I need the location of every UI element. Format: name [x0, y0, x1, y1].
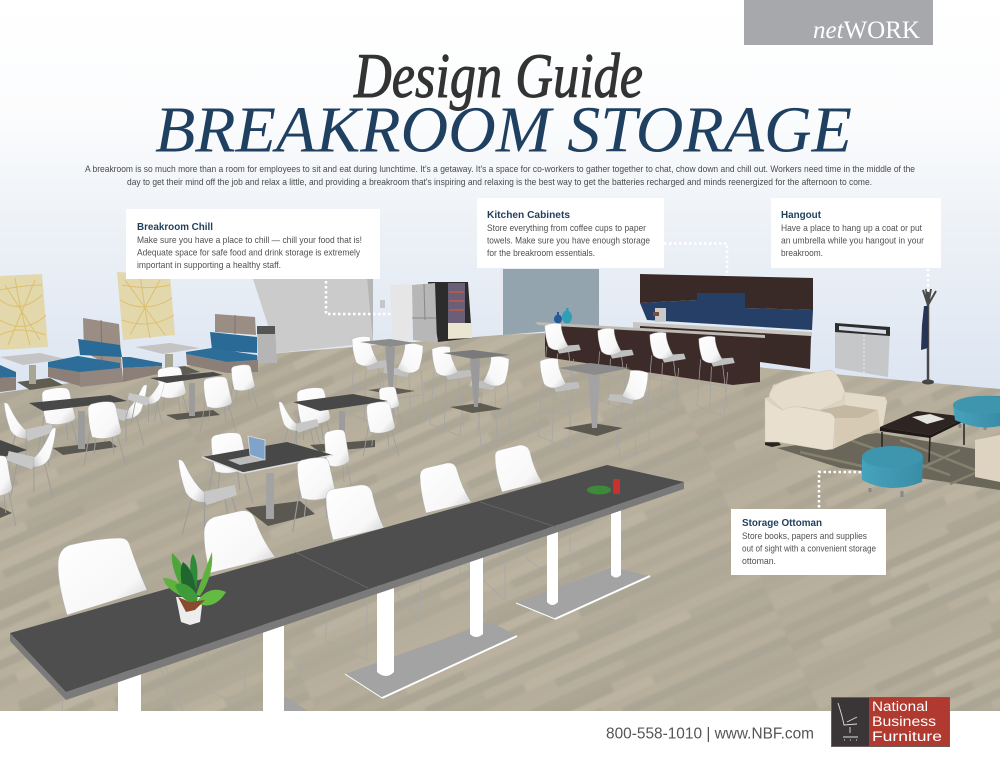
sofa right	[975, 435, 1000, 482]
bar table near kitchen	[538, 358, 650, 460]
floor	[0, 310, 1000, 730]
logo: National Business Furniture: National	[872, 699, 928, 714]
storage cabinet	[835, 323, 890, 377]
logo: National Business Furniture: Furniture	[872, 729, 942, 744]
lounge table left	[0, 353, 65, 390]
callout: storage ottoman: Storage Ottoman	[742, 517, 822, 529]
bar table far	[350, 336, 425, 433]
long table top	[10, 465, 684, 700]
blue vases	[554, 308, 572, 324]
intro paragraph	[85, 164, 915, 188]
lounge table centre	[135, 343, 200, 378]
booth seating right	[186, 314, 258, 373]
callout: storage ottoman: out of sight with a convenient storage	[742, 544, 876, 554]
footer band	[0, 711, 1000, 773]
callout: kitchen cabinets: for the breakroom essentials.	[487, 248, 595, 258]
refrigerator and vending machine	[390, 282, 472, 343]
coat rack	[921, 289, 936, 384]
callout: breakroom chill: Breakroom Chill	[137, 221, 213, 233]
callout: kitchen cabinets: Kitchen Cabinets	[487, 209, 570, 221]
doorway window	[500, 269, 599, 335]
heading: Breakroom Storage: BREAKROOM STORAGE	[155, 94, 852, 166]
sofa	[765, 370, 887, 450]
cafe table far left edge	[0, 428, 56, 526]
callout: kitchen cabinets: Store everything from coffee cups to paper	[487, 223, 646, 233]
brand tab: netWORK	[744, 0, 933, 45]
island bar stools	[543, 323, 735, 417]
intro paragraph: day to get their mind off the job and relax a little, and providing a breakroom that's inspiring and relaxing is the best way to get the batteries recharged and minds reenergized for the afternoon to come.	[127, 177, 872, 188]
callout: storage ottoman: Store books, papers and supplies	[742, 531, 867, 541]
callout: hangout: Hangout	[781, 209, 821, 221]
items on table	[587, 479, 620, 494]
long table chair backs	[58, 445, 542, 615]
cafe table with laptop	[178, 430, 353, 535]
plant on table	[163, 552, 226, 625]
wall art centre	[117, 272, 175, 340]
sofa back cushions	[769, 370, 845, 410]
callout: hangout	[771, 198, 941, 268]
callout: kitchen cabinets	[477, 198, 664, 268]
long table chair legs	[62, 490, 570, 711]
booth seating left	[0, 365, 16, 392]
partition wall	[253, 279, 373, 353]
callout: storage ottoman	[731, 509, 886, 575]
cafe table left	[4, 385, 147, 466]
callout: storage ottoman: ottoman.	[742, 556, 776, 566]
brand tab: netWORK: netWORK	[813, 17, 920, 44]
light switch	[380, 300, 385, 308]
sofa seat	[820, 405, 878, 418]
storage ottoman	[862, 446, 923, 497]
sofa right arm	[845, 393, 887, 428]
connector: breakroom chill	[326, 281, 393, 314]
scene: breakroom illustration	[0, 269, 1000, 730]
rug	[777, 433, 1000, 490]
teal ottoman back	[953, 396, 1000, 430]
wall art left	[0, 274, 48, 350]
callout: breakroom chill: Make sure you have a place to chill — chill your food that is!	[137, 235, 362, 245]
icon: office chair	[838, 703, 858, 740]
connector: kitchen cabinets	[664, 244, 727, 276]
callout: breakroom chill: Adequate space for safe food and drink storage is extremely	[137, 248, 360, 258]
callout: hangout: an umbrella while you hangout in your	[781, 236, 924, 246]
navy coat	[921, 306, 928, 350]
logo: National Business Furniture: Business	[872, 714, 936, 729]
bar table middle	[430, 346, 511, 446]
logo: National Business Furniture	[831, 697, 950, 747]
connector: hangout	[927, 269, 929, 291]
book	[912, 414, 945, 424]
heading: Design Guide: Design Guide	[353, 40, 643, 111]
callout: hangout: breakroom.	[781, 248, 823, 258]
kitchen cabinets	[633, 274, 813, 369]
contact line: 800-558-1010 | www.NBF.com	[606, 726, 814, 742]
callout: breakroom chill	[126, 209, 380, 279]
callout: kitchen cabinets: towels. Make sure you have enough storage	[487, 236, 650, 246]
trash receptacle	[257, 326, 277, 363]
callout: breakroom chill: important in supporting a healthy staff.	[137, 260, 281, 270]
laptop	[228, 436, 265, 465]
cafe table back	[126, 365, 258, 431]
long table base plates	[270, 567, 650, 711]
cafe table centre	[279, 387, 402, 456]
coffee machine	[653, 308, 666, 322]
kitchen island	[535, 308, 765, 385]
callout: hangout: Have a place to hang up a coat or put	[781, 223, 922, 233]
intro paragraph: A breakroom is so much more than a room for employees to sit and eat during lunchtime. It's a getaway. It's a space for co-workers to gather together to chat, chow down and chill out. Workers need time in the middle of the	[85, 164, 915, 175]
connector: storage ottoman	[819, 472, 861, 508]
wall background	[0, 0, 1000, 400]
coffee table	[880, 411, 967, 462]
booth seating centre	[48, 318, 162, 387]
sofa left arm	[765, 398, 835, 450]
long table legs	[118, 505, 621, 711]
sofa foot	[765, 441, 781, 447]
